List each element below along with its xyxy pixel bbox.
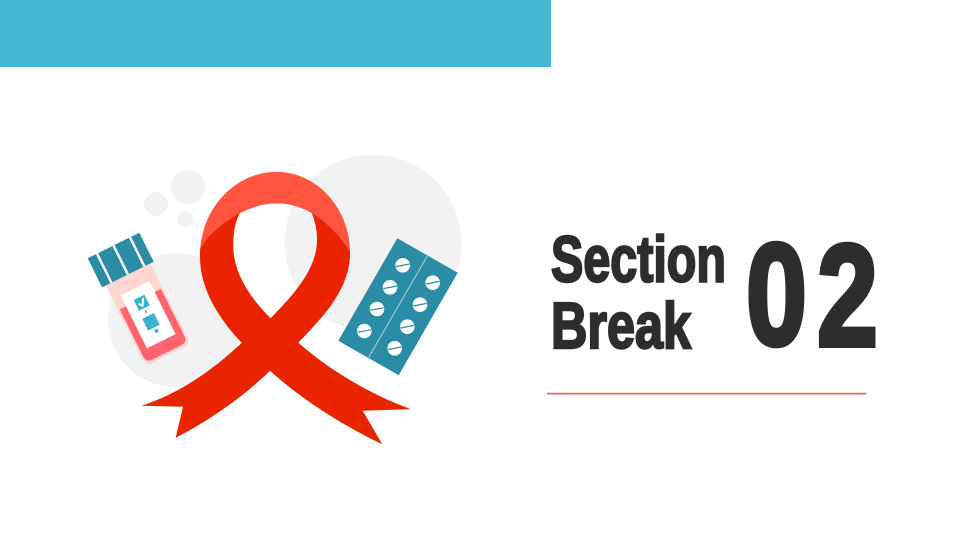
heading: Section Break xyxy=(551,222,726,362)
icon: red awareness ribbon xyxy=(142,172,411,444)
section number: 0 xyxy=(746,214,807,376)
section number: 2 xyxy=(817,214,878,376)
illustration: ribbon, pills and bottle xyxy=(88,154,461,444)
icon: medicine bottle xyxy=(88,233,194,368)
heading: Section Break: Section xyxy=(551,222,726,296)
section number xyxy=(746,214,878,376)
background circles xyxy=(108,154,462,387)
top banner xyxy=(0,0,551,67)
divider rule xyxy=(547,393,866,394)
icon: blister pack xyxy=(338,238,458,375)
heading: Section Break: Break xyxy=(551,289,692,362)
ribbon highlight xyxy=(201,172,350,252)
